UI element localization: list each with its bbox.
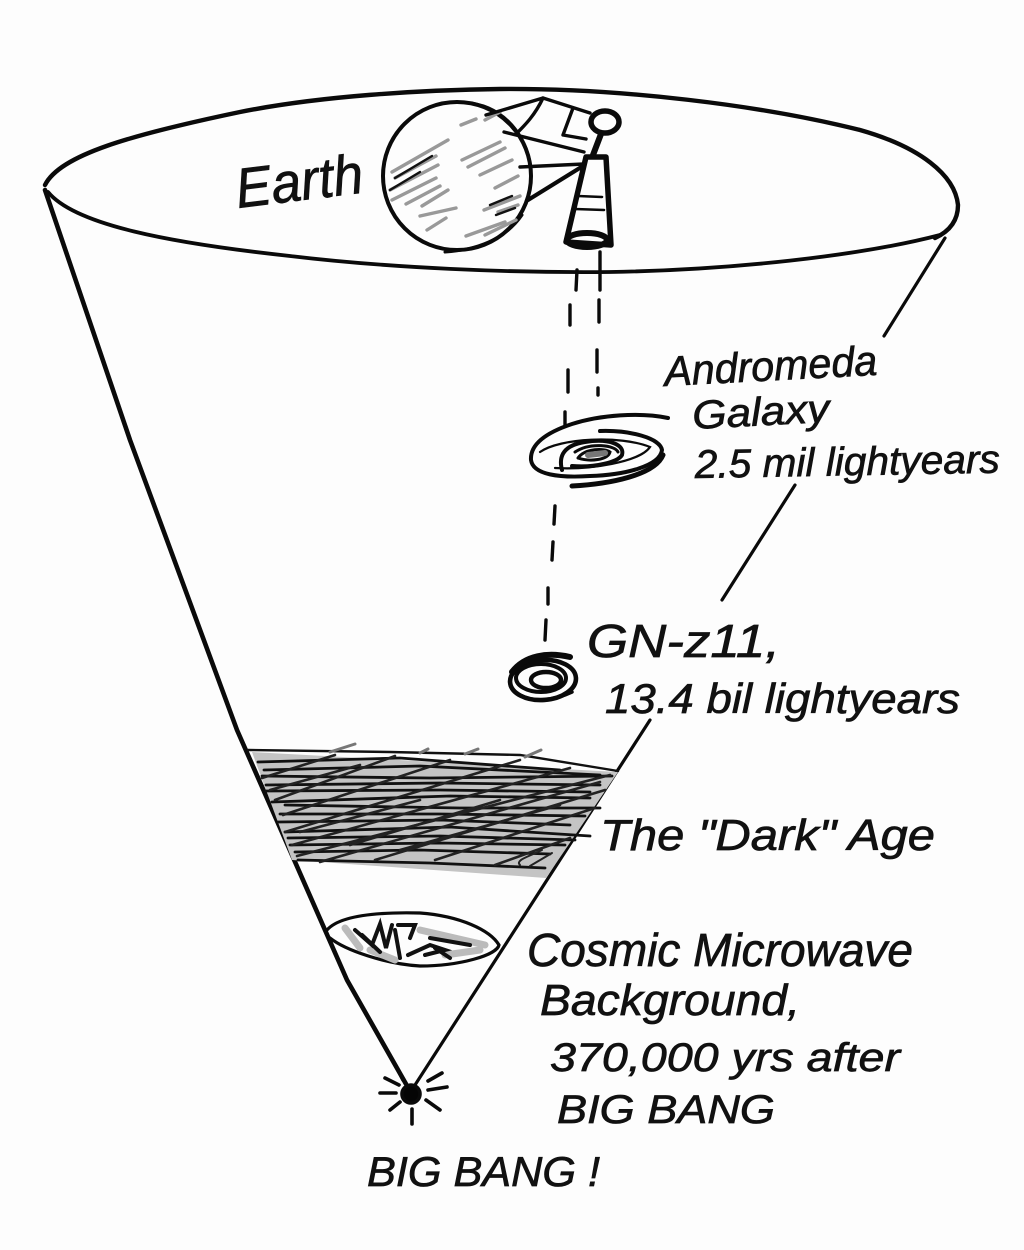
label: Earth: Earth (232, 142, 367, 220)
label: Andromeda Galaxy distance (660, 337, 1000, 487)
label: Cosmic Microwave Background: 370,000 yrs after (550, 1036, 902, 1080)
label: Cosmic Microwave Background: Cosmic Microwave (527, 924, 913, 976)
sketch strokes above band (330, 744, 541, 757)
horizontal hatching (258, 758, 612, 868)
telescope body (566, 111, 619, 247)
andromeda galaxy (531, 415, 668, 486)
GN-z11 galaxy (509, 655, 577, 702)
cosmic microwave background disc (327, 913, 499, 966)
hubble telescope (486, 98, 619, 247)
cone outline (45, 89, 958, 1085)
label: GN-z11 distance: 13.4 bil lightyears (605, 675, 960, 722)
earth (383, 102, 531, 252)
label: Big Bang: BIG BANG ! (367, 1148, 600, 1195)
label: Andromeda Galaxy distance: 2.5 mil lightyears (693, 438, 1000, 487)
dark age hatched band (248, 744, 618, 878)
label: Cosmic Microwave Background: BIG BANG (557, 1088, 775, 1132)
cone right edge (415, 238, 945, 1085)
earth shading (390, 112, 520, 236)
cone left edge (45, 190, 406, 1084)
label: Cosmic Microwave Background (527, 924, 913, 1132)
label: GN-z11 distance: GN-z11, (587, 615, 780, 667)
label: Cosmic Microwave Background: Background, (540, 976, 800, 1025)
light path dashes (545, 252, 600, 640)
cone rim ellipse (45, 89, 958, 272)
label: The Dark Age: The "Dark" Age (600, 811, 935, 860)
big bang burst (380, 1066, 447, 1124)
label: GN-z11 distance (587, 615, 960, 722)
telescope arms (486, 98, 590, 200)
diagonal hatching (262, 755, 610, 865)
label: Andromeda Galaxy distance: Galaxy (691, 387, 834, 438)
label: Andromeda Galaxy distance: Andromeda (660, 337, 878, 395)
